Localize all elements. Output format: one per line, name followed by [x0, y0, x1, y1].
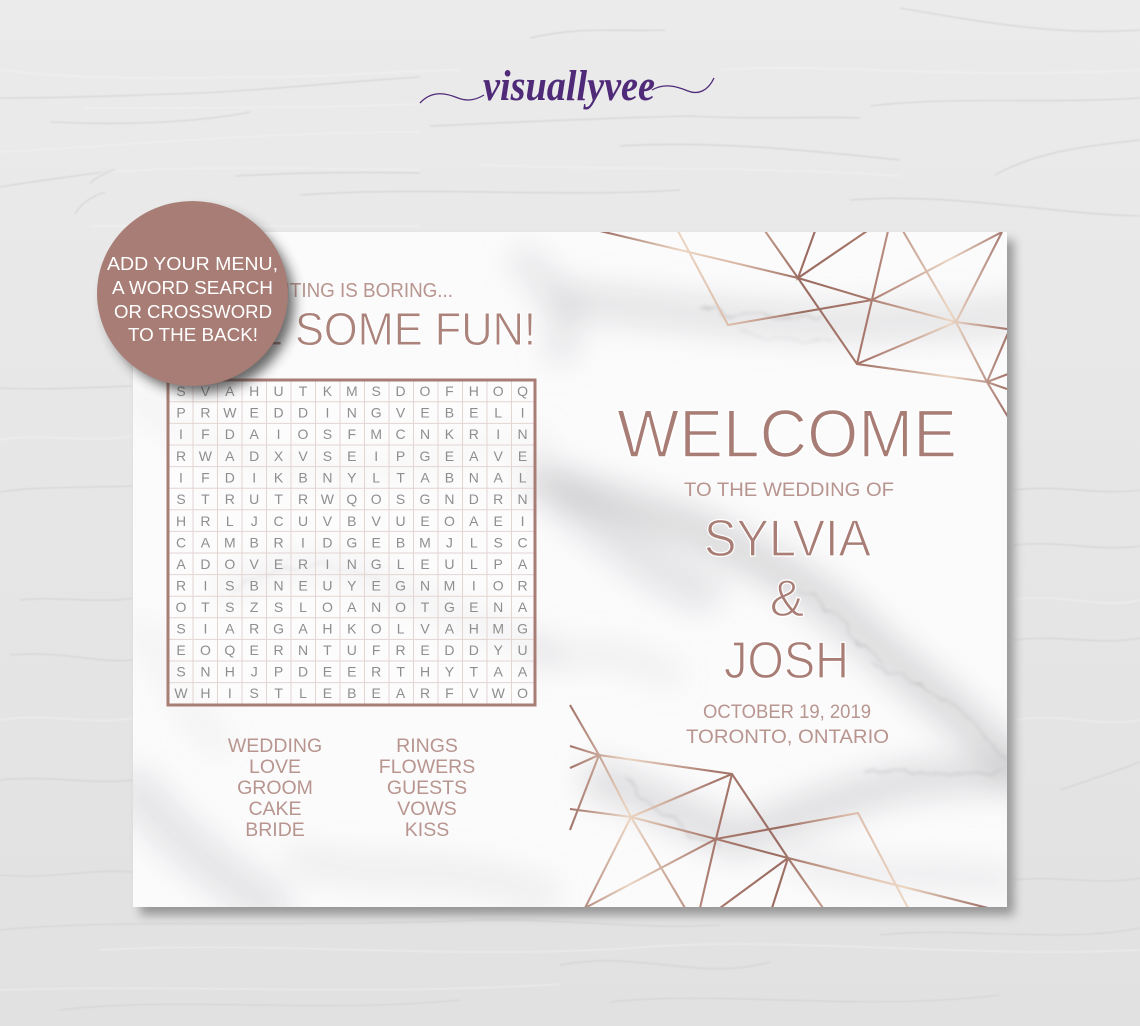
- word list, left column: LOVE: [249, 756, 301, 778]
- callout badge: OR CROSSWORD: [114, 301, 272, 322]
- logo: visuallyvee script wordmark: visuallyvee: [483, 63, 655, 110]
- word search grid: SIARGAHKOLVAHMG: [176, 620, 528, 636]
- word search grid: RWADXVSEIPGEAVE: [176, 448, 527, 464]
- word list, right column: [379, 735, 475, 841]
- word search grid: OTSZSLOANOTGENA: [176, 599, 528, 615]
- word list, right column: VOWS: [397, 798, 457, 820]
- name: Sylvia: SYLVIA: [704, 510, 871, 568]
- word search grid: SNHJPDEERTHYTAA: [176, 664, 528, 680]
- geometric rose-gold lines, top right: [600, 231, 1008, 417]
- callout badge: ADD YOUR MENU,: [107, 253, 278, 274]
- logo: visuallyvee script wordmark: [420, 63, 714, 110]
- word search grid: WHISTLEBEARFVWO: [174, 685, 528, 701]
- location: TORONTO, ONTARIO: [686, 726, 889, 748]
- word search grid: RISBNEUYEGNMIOR: [176, 578, 528, 594]
- word search grid: ADOVERINGLEULPA: [176, 556, 528, 572]
- word search grid: HRLJCUVBVUEOAEI: [176, 513, 525, 529]
- word list, left column: BRIDE: [245, 819, 305, 841]
- name: Josh: JOSH: [724, 632, 849, 690]
- word search grid: SVAHUTKMSDOFHOQ: [176, 383, 528, 399]
- word search grid: IFDAIOSFMCNKRIN: [179, 426, 528, 442]
- callout badge: A WORD SEARCH: [112, 277, 273, 298]
- date: OCTOBER 19, 2019: [703, 701, 871, 723]
- word search grid: PRWEDDINGVEBELI: [176, 404, 525, 420]
- word search grid: STRUTRWQOSGNDRN: [176, 491, 528, 507]
- subtitle: to the wedding of: TO THE WEDDING OF: [684, 479, 894, 501]
- callout badge: TO THE BACK!: [128, 324, 258, 345]
- word search grid: IFDIKBNYLTABNAL: [179, 470, 527, 486]
- ampersand: &: [770, 570, 804, 628]
- panel: marble program card: [133, 232, 1015, 907]
- word list, left column: GROOM: [237, 777, 313, 799]
- geometric rose-gold lines, bottom left: [570, 705, 988, 908]
- card shadow: [140, 240, 1014, 915]
- title: welcome: WELCOME: [617, 396, 957, 472]
- word search grid: EOQERNTUFREDDYU: [176, 642, 528, 658]
- word list, left column: [228, 735, 322, 841]
- word search grid: CAMBRIDGEBMJLSC: [176, 534, 528, 550]
- word list, right column: GUESTS: [387, 777, 467, 799]
- word search grid: [168, 380, 535, 705]
- word list, right column: FLOWERS: [379, 756, 475, 778]
- word list, left column: CAKE: [248, 798, 302, 820]
- word list, left column: WEDDING: [228, 735, 322, 757]
- word list, right column: RINGS: [396, 735, 458, 757]
- callout badge: [97, 201, 294, 393]
- heading: have some fun: HAVE SOME FUN!: [168, 303, 536, 355]
- word list, right column: KISS: [405, 819, 449, 841]
- heading: waiting is boring: WAITING IS BORING...: [255, 280, 453, 302]
